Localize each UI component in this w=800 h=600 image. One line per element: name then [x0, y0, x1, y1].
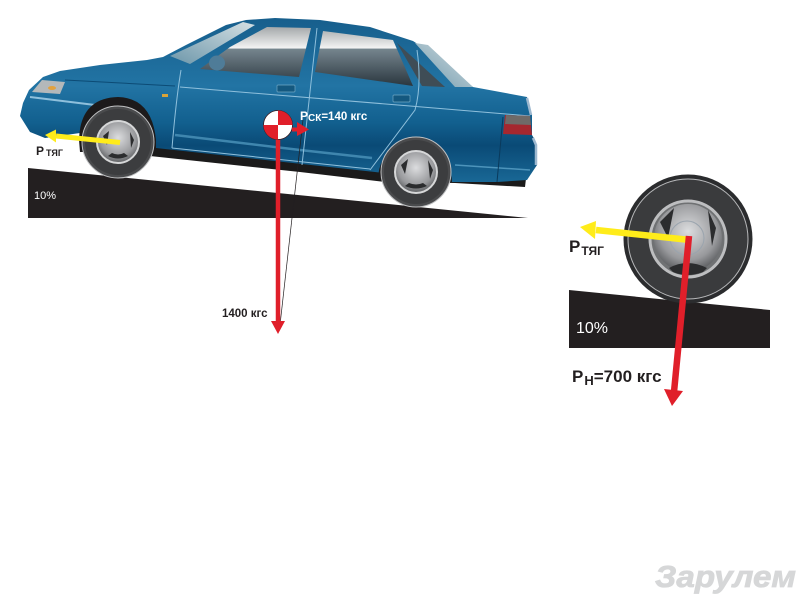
door handles	[277, 85, 410, 102]
label: traction force on car: Р	[36, 144, 44, 158]
rear wheel	[381, 137, 451, 207]
logo: Зарулем	[655, 559, 796, 594]
side mirror	[209, 56, 225, 70]
label: downslope force: СК	[308, 113, 322, 124]
ramp detail	[569, 290, 770, 348]
label: normal force on wheel: Р	[572, 367, 583, 386]
arrow: downslope force (red)	[292, 122, 309, 136]
label: normal force on wheel: =700 кгс	[594, 367, 662, 386]
rear quarter window	[397, 43, 445, 87]
car illustration	[20, 18, 537, 207]
large wheel detail	[624, 174, 752, 304]
front wheel	[82, 106, 154, 178]
front wheel arch	[79, 97, 156, 152]
rear windscreen	[415, 43, 473, 87]
label: traction force on car: ТЯГ	[46, 148, 63, 158]
arrow: weight 1400 kgf (red)	[271, 125, 285, 334]
label: traction force on wheel: Р	[569, 237, 580, 256]
label: normal force on wheel: Н	[584, 373, 594, 388]
tail end trim	[527, 98, 536, 165]
front door window	[200, 27, 311, 77]
turn signal	[162, 94, 168, 97]
ramp grade label: 10%	[34, 190, 56, 202]
rear wheel arch	[378, 145, 452, 182]
car body	[20, 18, 537, 182]
hood line	[65, 80, 175, 86]
centre of gravity marker	[264, 110, 292, 140]
tail light	[503, 115, 532, 135]
ramp with car	[28, 168, 528, 218]
arrow: normal force on wheel (red)	[664, 236, 689, 406]
rear door window	[315, 31, 413, 86]
label: traction force on wheel: ТЯГ	[581, 244, 604, 258]
ramp detail grade label: 10%	[576, 320, 608, 337]
body lines	[30, 28, 530, 182]
arrow: traction force on wheel (yellow)	[580, 221, 690, 240]
thin force-resultant line	[280, 120, 303, 325]
label: weight: 1400 кгс	[222, 308, 268, 320]
car underbody shadow	[150, 146, 527, 187]
label: downslope force: =140 кгс	[321, 111, 368, 123]
arrow: car traction force (yellow)	[45, 130, 120, 142]
headlight	[32, 80, 65, 94]
windshield	[170, 22, 255, 64]
label: downslope force: Р	[300, 109, 308, 123]
